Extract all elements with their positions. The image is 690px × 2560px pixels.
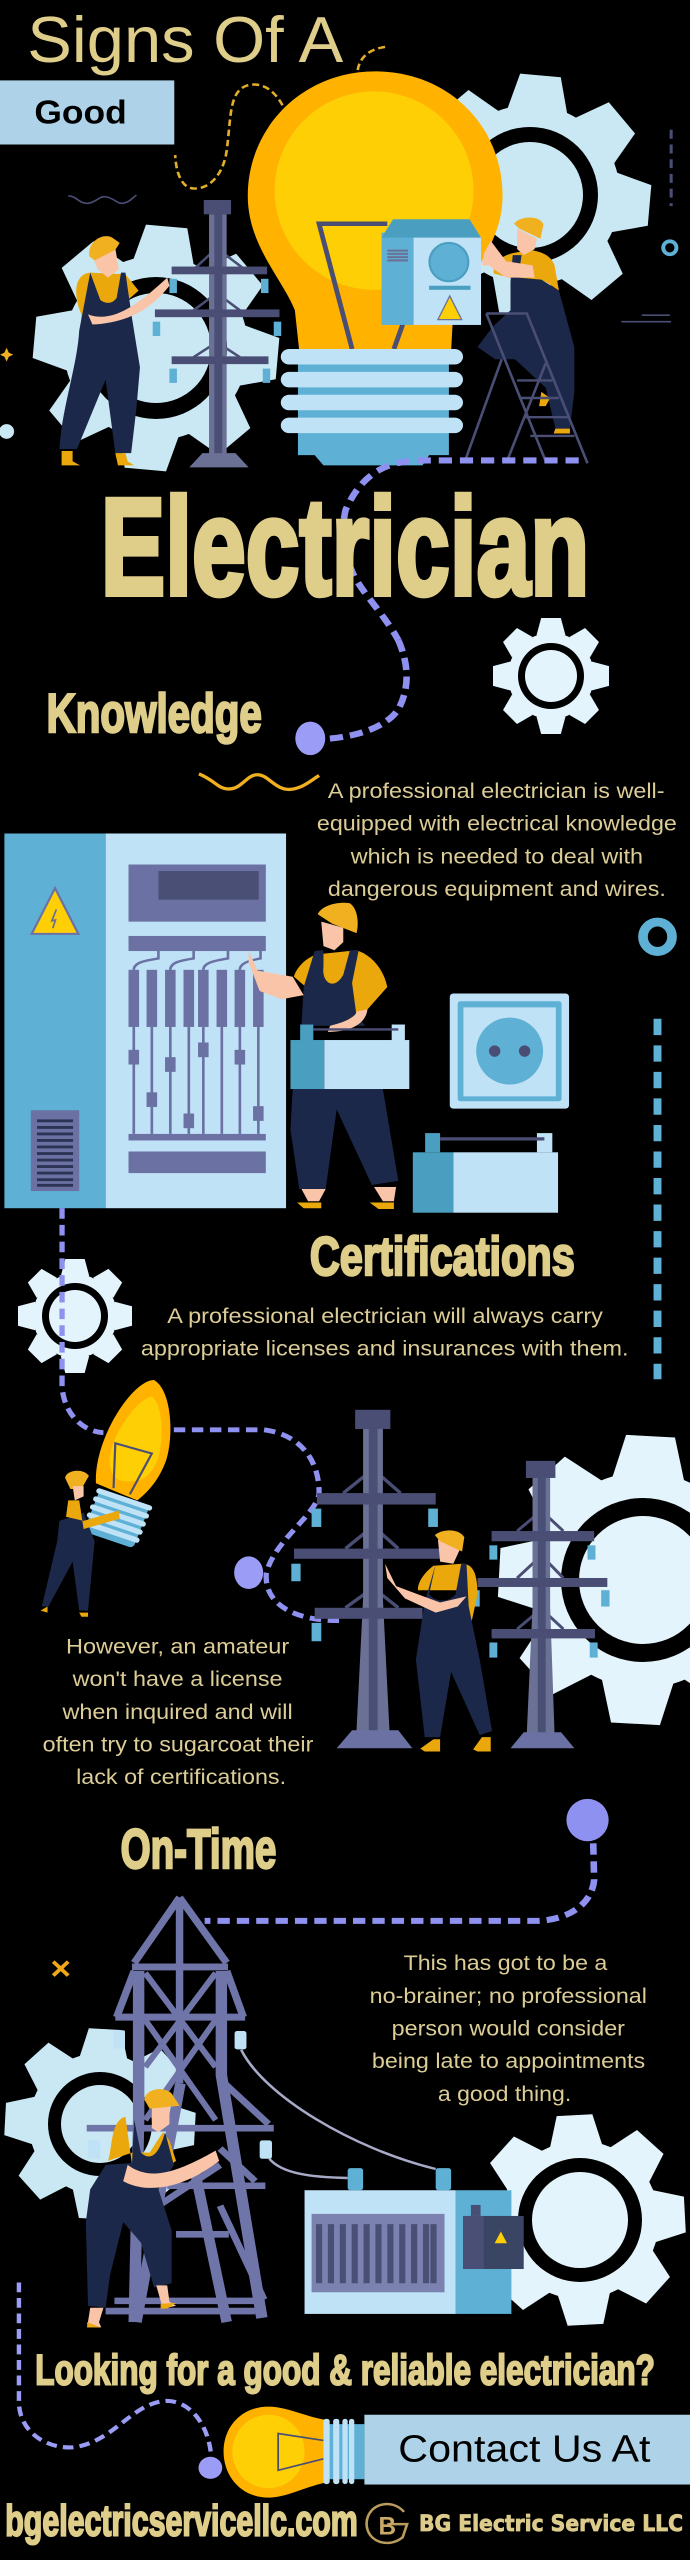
text block: on-time paragraph: being late to appointments [372, 2049, 645, 2073]
connector: purple dot and dashes [205, 1799, 609, 1921]
text block: knowledge paragraph [317, 779, 677, 901]
gear: top right [400, 65, 660, 325]
text block: amateur paragraph: However, an amateur [66, 1634, 289, 1658]
text block: amateur paragraph [43, 1634, 313, 1789]
text block: amateur paragraph: lack of certifications. [76, 1765, 286, 1789]
figure: right worker on ladder [466, 218, 588, 463]
dashed connector line [343, 460, 579, 640]
text block: knowledge paragraph: A professional electrician is well- [328, 779, 665, 803]
panel: certifications section [40, 1208, 628, 1921]
panel: on-time section [5, 1898, 690, 2545]
text block: amateur paragraph: when inquired and will [61, 1700, 293, 1724]
text block: knowledge paragraph: which is needed to deal with [350, 844, 643, 868]
dashed connector line [62, 1208, 343, 1621]
text block: certifications paragraph: appropriate licenses and insurances with them. [141, 1336, 628, 1360]
icon: ring [643, 922, 672, 951]
gear: middle right [492, 1429, 690, 1731]
blue dashed vertical line [649, 1019, 667, 1379]
text block: on-time paragraph: This has got to be a [404, 1951, 608, 1975]
gear: bottom left [0, 2024, 200, 2224]
gear: bottom right [470, 2110, 690, 2330]
label: Good [0, 80, 174, 145]
gear: beside certifications text [18, 1259, 132, 1373]
text block: on-time paragraph: a good thing. [438, 2082, 571, 2106]
dashed connector end [295, 640, 407, 755]
icon: battery [413, 1133, 558, 1213]
insulators and wires [88, 2030, 436, 2178]
text block: on-time paragraph [370, 1951, 647, 2106]
dashed connector line [19, 2282, 211, 2459]
logo: BG Electric Service: B [378, 2511, 396, 2540]
logo: BG Electric Service [367, 2504, 683, 2543]
yellow wave [199, 774, 319, 789]
figure: worker climbing tower [86, 2089, 219, 2327]
text block: knowledge paragraph: equipped with electrical knowledge [317, 811, 677, 835]
icon: wall socket [450, 994, 569, 1109]
label: Good: Good [34, 94, 127, 131]
icon: electric meter box [382, 219, 481, 325]
banner: Contact Us At [364, 2415, 690, 2485]
text block: on-time paragraph: person would consider [392, 2016, 625, 2040]
banner: Contact Us At: Contact Us At [398, 2428, 650, 2470]
icon: orange cross [53, 1962, 68, 1976]
text block: amateur paragraph: often try to sugarcoat their [43, 1732, 313, 1756]
heading: Certifications: Certifications [310, 1226, 575, 1287]
figure: small worker with bulb [40, 1471, 120, 1617]
icon: pylon right [472, 1461, 610, 1748]
grey wave [68, 195, 136, 203]
text block: on-time paragraph: no-brainer; no professional [370, 1984, 647, 2008]
text block: amateur paragraph: won't have a license [72, 1667, 283, 1691]
gear: top left [24, 216, 288, 480]
panel: hero section [0, 4, 676, 640]
figure: worker beside pylons [385, 1530, 492, 1751]
icon: power pylon [153, 200, 281, 467]
icon: lattice tower [87, 1898, 274, 2322]
gear: beside knowledge heading [493, 618, 609, 734]
icon: transformer [305, 2168, 524, 2314]
website url: bgelectricservicellc.com [5, 2496, 358, 2545]
heading: Knowledge: Knowledge [47, 683, 262, 745]
figure: worker with toolbox [249, 903, 409, 1209]
icon: large light bulb [248, 71, 503, 465]
decorative sparkle, dots and dashes [0, 130, 676, 439]
icon: electrical panel [4, 833, 286, 1208]
icon: purple dot [234, 1556, 263, 1589]
figure: left worker [59, 236, 169, 465]
icon: pylon left [291, 1410, 440, 1748]
icon: purple dot [198, 2457, 222, 2479]
text block: certifications paragraph [141, 1304, 628, 1360]
text block: knowledge paragraph: dangerous equipment and wires. [328, 877, 666, 901]
icon: candle bulb [81, 1380, 170, 1549]
panel: knowledge section [4, 640, 677, 1379]
icon: horizontal bulb [224, 2407, 364, 2498]
text block: certifications paragraph: A professional electrician will always carry [167, 1304, 603, 1328]
yellow dashed wires [175, 47, 385, 189]
title: Signs Of A: Signs Of A [27, 4, 344, 76]
heading: On-Time: On-Time [121, 1818, 276, 1880]
